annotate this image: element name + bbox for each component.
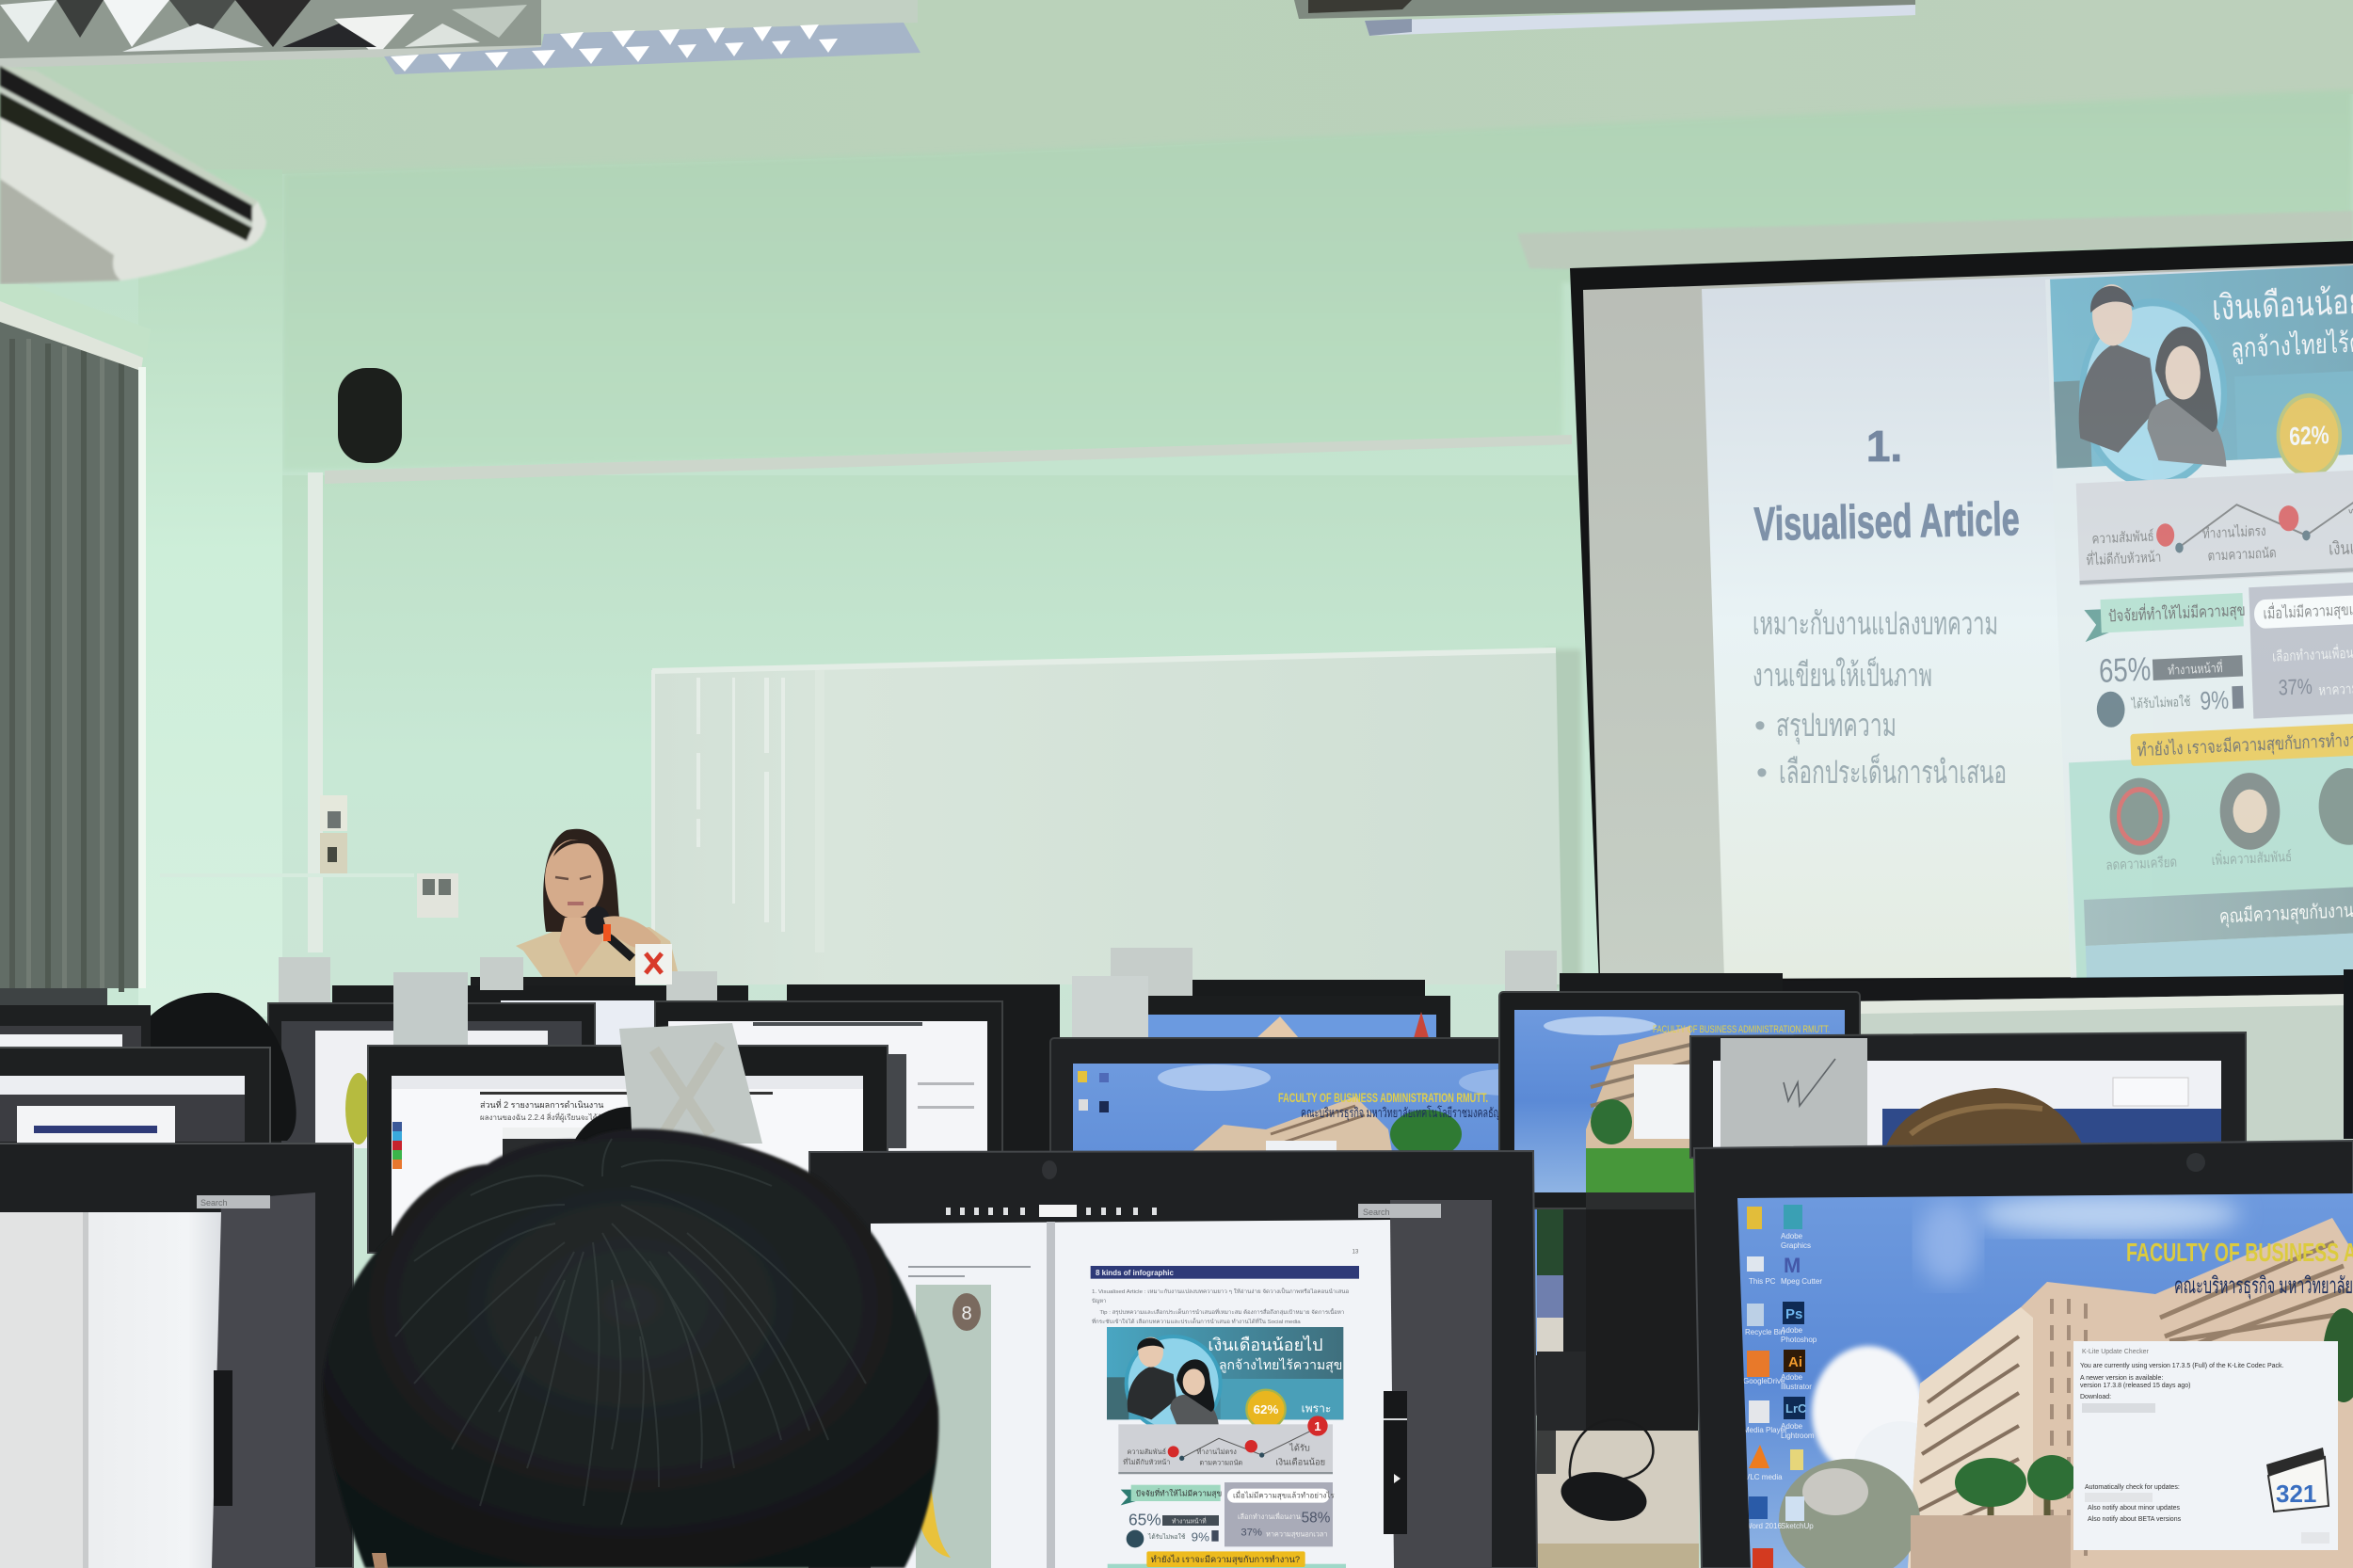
back row monitor, webpage bbox=[655, 1001, 1002, 1152]
centre front monitor bbox=[809, 1151, 1537, 1568]
monitor stand and dark gap bbox=[1586, 1192, 1698, 1431]
projection screen bbox=[1570, 230, 2353, 1029]
slide body text bbox=[1753, 606, 2007, 791]
update dialog: Download: bbox=[2080, 1394, 2111, 1400]
page infographic bbox=[1107, 1327, 1346, 1568]
left front monitor bbox=[0, 1144, 353, 1568]
wallpaper Thai line: คณะบริหารธุรกิจ มหาวิทยาลัยเทคโนโลยีราชมงคลธัญบุรี bbox=[1301, 1105, 1511, 1121]
open book pages bbox=[871, 1220, 1394, 1568]
update dialog: You are currently using version 17.3.5 (Full) of the K-Lite Codec Pack. bbox=[2080, 1363, 2284, 1369]
student head in foreground bbox=[323, 1128, 938, 1568]
projected salary infographic: 37% bbox=[2278, 675, 2313, 700]
page infographic: ตามความถนัด bbox=[1199, 1459, 1243, 1467]
whiteboard bbox=[651, 648, 1562, 984]
slide body text: งานเขียนให้เป็นภาพ bbox=[1753, 656, 1932, 694]
far back centre monitor bbox=[787, 973, 1783, 1154]
book paragraph bbox=[1092, 1287, 1349, 1325]
viewer search box bbox=[1358, 1204, 1441, 1218]
web article text bbox=[480, 1092, 773, 1123]
update dialog: Automatically check for updates: bbox=[2085, 1484, 2180, 1491]
page infographic: 62% bbox=[1254, 1402, 1278, 1416]
ceiling light left bbox=[0, 0, 541, 68]
page infographic: ทำงานหน้าที่ bbox=[1172, 1516, 1207, 1525]
social share icons bbox=[392, 1122, 402, 1169]
mid monitor with faculty wallpaper bbox=[1050, 1038, 1587, 1436]
mouse cable bbox=[1570, 1419, 1653, 1487]
slide text panel bbox=[1702, 265, 2353, 979]
page infographic: 1 bbox=[1314, 1419, 1321, 1433]
page infographic: ได้รับ bbox=[1289, 1443, 1310, 1453]
red X card bbox=[635, 944, 672, 984]
page infographic: เงินเดือนน้อย bbox=[1275, 1458, 1325, 1467]
air conditioner bbox=[0, 66, 266, 284]
321 media player logo bbox=[2266, 1448, 2329, 1512]
book paragraph: Tip : สรุปบทความและเลือกประเด็นการนำเสนอที่เหมาะสม ต้องการสื่อถึงกลุ่มเป้าหมาย จัดการเนื้อหา bbox=[1099, 1307, 1344, 1316]
wall speaker bbox=[338, 368, 402, 463]
page infographic: ได้รับไม่พอใช้ bbox=[1147, 1533, 1186, 1541]
desktop icons: Graphics bbox=[1781, 1241, 1811, 1250]
section header bar bbox=[1091, 1266, 1359, 1279]
page infographic: ปัจจัยที่ทำให้ไม่มีความสุข bbox=[1136, 1487, 1222, 1498]
page infographic: เมื่อไม่มีความสุขแล้วทำอย่างไร bbox=[1233, 1490, 1335, 1500]
wallpaper with lawn bbox=[1514, 1010, 1845, 1192]
page infographic: เพราะ bbox=[1302, 1402, 1331, 1416]
signed card bbox=[1721, 1038, 1867, 1149]
slide body text: เลือกประเด็นการนำเสนอ bbox=[1779, 753, 2007, 791]
ceiling light top right bbox=[1294, 0, 1915, 36]
321 media player logo: 321 bbox=[2276, 1480, 2316, 1508]
small blank cards bbox=[393, 972, 1148, 1046]
desktop icons: Illustrator bbox=[1781, 1383, 1812, 1391]
main centre monitor behind head bbox=[368, 1046, 888, 1253]
screen base bar bbox=[1599, 969, 2353, 1139]
desktop icons: Word 2016 bbox=[1745, 1522, 1783, 1530]
desktop icons: Ps bbox=[1785, 1306, 1802, 1322]
desktop icons: SketchUp bbox=[1781, 1522, 1814, 1530]
web article text: ผลงานของฉัน 2.2.4 สิ่งที่ผู้เรียนจะได้รับ bbox=[480, 1112, 606, 1123]
desktop icons: GoogleDrive bbox=[1743, 1377, 1785, 1385]
section header bar: 8 kinds of infographic bbox=[1096, 1269, 1175, 1277]
left row monitor behind bbox=[0, 1005, 151, 1048]
desktop icons: Lightroom bbox=[1781, 1432, 1815, 1440]
window blind bbox=[0, 284, 151, 996]
viewer search box: Search bbox=[200, 1198, 228, 1208]
slide number: 1. bbox=[1866, 422, 1902, 471]
presenter bbox=[516, 829, 680, 979]
desktop icons: LrC bbox=[1785, 1401, 1807, 1416]
desktop icons: Ai bbox=[1788, 1354, 1802, 1370]
update dialog: K-Lite Update Checker bbox=[2082, 1349, 2149, 1355]
page infographic: 9% bbox=[1192, 1529, 1209, 1544]
desktop icons: Media Player bbox=[1743, 1426, 1787, 1434]
desktop icons: M bbox=[1784, 1254, 1801, 1277]
mid right monitor with white page bbox=[1690, 1032, 2246, 1158]
building bbox=[1908, 1218, 2353, 1568]
wall outlet boxes bbox=[320, 795, 347, 873]
projected salary infographic: ทำงานไม่ตรง bbox=[2202, 522, 2266, 541]
update dialog bbox=[2073, 1341, 2338, 1550]
projected salary infographic: 65% bbox=[2098, 649, 2152, 690]
page infographic: ทำยังไง เราจะมีความสุขกับการทำงาน? bbox=[1151, 1554, 1300, 1565]
page infographic: เงินเดือนน้อยไป bbox=[1208, 1335, 1323, 1354]
book paragraph: ปัญหา bbox=[1092, 1298, 1106, 1304]
wall pipe and rail bbox=[160, 435, 1572, 952]
slide body text: สรุปบทความ bbox=[1776, 708, 1897, 744]
page infographic: เลือกทำงานเพื่อนงาน bbox=[1238, 1512, 1301, 1521]
projected salary infographic: ลดความเครียด bbox=[2105, 854, 2177, 873]
viewer search box bbox=[197, 1195, 270, 1208]
left back monitor, e-book viewer bbox=[268, 1003, 595, 1148]
thermostat bbox=[417, 873, 458, 918]
left page poster: 8 bbox=[961, 1304, 972, 1324]
back row monitor with wallpaper bbox=[1148, 996, 1450, 1043]
projected salary infographic: ได้รับไม่พอใช้ bbox=[2131, 694, 2191, 712]
desktop icons: Recycle Bin bbox=[1745, 1328, 1785, 1336]
page infographic: ความสัมพันธ์ bbox=[1128, 1448, 1166, 1456]
desktop icons: Adobe bbox=[1781, 1373, 1803, 1382]
ceiling light right of left fixture bbox=[384, 0, 920, 74]
left row monitor bbox=[0, 1048, 270, 1151]
desktop icons: Adobe bbox=[1781, 1422, 1803, 1431]
brown hair bbox=[1886, 1088, 2082, 1150]
page infographic: 65% bbox=[1128, 1511, 1161, 1529]
desktop icons: Adobe bbox=[1781, 1326, 1803, 1335]
viewer side tab bbox=[1384, 1391, 1407, 1534]
projected salary infographic: ความสัมพันธ์ bbox=[2091, 528, 2154, 547]
projected salary infographic: 9% bbox=[2200, 686, 2230, 716]
projected salary infographic: ตามความถนัด bbox=[2207, 545, 2277, 564]
page infographic: 37% bbox=[1241, 1528, 1262, 1539]
desktop icons: Mpeg Cutter bbox=[1781, 1277, 1822, 1286]
page infographic: 58% bbox=[1302, 1510, 1331, 1526]
desk surface bbox=[1537, 1431, 1699, 1568]
webcam bbox=[2186, 1153, 2205, 1172]
person behind hair bbox=[570, 1107, 632, 1153]
page infographic: หาความสุขนอกเวลา bbox=[1266, 1530, 1327, 1539]
desktop icons bbox=[1743, 1205, 1822, 1568]
projection screen housing bbox=[1517, 211, 2353, 269]
slide body text: เหมาะกับงานแปลงบทความ bbox=[1753, 606, 1998, 642]
desktop icons: This PC bbox=[1749, 1277, 1776, 1286]
desktop icons: VLC media bbox=[1745, 1473, 1783, 1481]
projected salary infographic: ปัจจัยที่ทำให้ไม่มีความสุข bbox=[2108, 599, 2246, 627]
left page text bbox=[908, 1266, 1031, 1277]
right front monitor bbox=[1694, 1141, 2353, 1568]
desktop icons bbox=[1078, 1071, 1109, 1112]
wallpaper with lawn: FACULTY OF BUSINESS ADMINISTRATION RMUTT. bbox=[1653, 1024, 1830, 1035]
web article text: ส่วนที่ 2 รายงานผลการดำเนินงาน bbox=[480, 1098, 603, 1110]
viewer side tab bbox=[214, 1370, 232, 1506]
far back left monitors bbox=[0, 977, 748, 1111]
slide heading: Visualised Article bbox=[1753, 492, 2020, 551]
university crest bbox=[1515, 1068, 1536, 1116]
left page poster bbox=[916, 1285, 991, 1568]
page infographic: ลูกจ้างไทยไร้ความสุข bbox=[1219, 1357, 1342, 1373]
projected salary infographic: เพิ่มความสัมพันธ์ bbox=[2211, 846, 2292, 868]
name card with faded X bbox=[619, 1023, 762, 1144]
back row name cards bbox=[279, 948, 1557, 1005]
wallpaper bbox=[1073, 1064, 1563, 1355]
trees bbox=[1779, 1459, 1920, 1568]
viewer toolbar bbox=[946, 1205, 1157, 1217]
book page text: 13 bbox=[1353, 1250, 1359, 1256]
viewer search box: Search bbox=[1363, 1208, 1390, 1217]
update dialog: Also notify about BETA versions bbox=[2088, 1516, 2182, 1523]
projected salary infographic: 62% bbox=[2289, 422, 2329, 452]
book paragraph: ที่กระชับเข้าใจได้ เลือกบทความและประเด็นการนำเสนอ ทำงานได้ที่ใน Social media bbox=[1092, 1317, 1302, 1325]
desktop icons: Photoshop bbox=[1781, 1336, 1817, 1344]
slide body text: • bbox=[1756, 755, 1768, 791]
book page text bbox=[1091, 1250, 1359, 1568]
projected salary infographic: ทำงานหน้าที่ bbox=[2168, 659, 2223, 678]
page infographic: ที่ไม่ดีกับหัวหน้า bbox=[1123, 1457, 1170, 1466]
projected salary infographic: ที่ไม่ดีกับหัวหน้า bbox=[2086, 547, 2162, 568]
slide body text: • bbox=[1754, 708, 1766, 744]
seated person, far left bbox=[132, 993, 296, 1141]
projected salary infographic bbox=[2045, 265, 2353, 978]
update dialog: A newer version is available: bbox=[2080, 1375, 2163, 1382]
book paragraph: 1. Visualised Article : เหมาะกับงานแปลงบทความยาว ๆ ให้อ่านง่าย จัดวางเป็นภาพหรือไอคอนนำเสนอ bbox=[1092, 1287, 1349, 1295]
computer mouse bbox=[1537, 1431, 1651, 1528]
page infographic: ทำงานไม่ตรง bbox=[1196, 1448, 1237, 1456]
desktop wallpaper bbox=[1737, 1193, 2353, 1568]
desktop icons: Adobe bbox=[1781, 1232, 1803, 1240]
mid right monitor bbox=[1499, 992, 1860, 1208]
update dialog: Also notify about minor updates bbox=[2088, 1505, 2181, 1512]
wallpaper heading: FACULTY OF BUSINESS ADMINISTRATION RMUTT. bbox=[1278, 1090, 1488, 1105]
update dialog: version 17.3.8 (released 15 days ago) bbox=[2080, 1383, 2191, 1389]
